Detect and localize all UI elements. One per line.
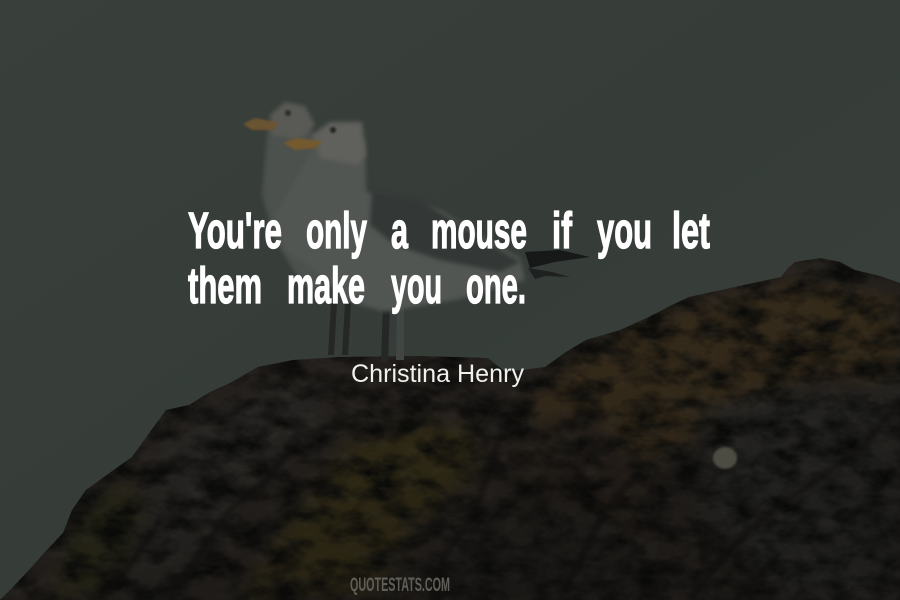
front gull body xyxy=(275,140,525,312)
quote line 1: You're xyxy=(188,202,282,259)
rear gull eye xyxy=(285,110,291,116)
rock: moss and stone patches xyxy=(264,282,900,579)
rock: dark crevices xyxy=(126,412,890,569)
front gull eye xyxy=(330,127,336,133)
rock: mossy cliff xyxy=(0,250,900,600)
quote line 2: you xyxy=(391,257,442,314)
rear gull beak xyxy=(243,118,278,130)
quote line 1 xyxy=(188,202,710,259)
gull tail feathers xyxy=(525,250,590,268)
quote line 2: make xyxy=(287,257,365,314)
quote line 1: only xyxy=(306,202,367,259)
front gull legs xyxy=(381,305,404,362)
rock: surface texture xyxy=(0,250,900,600)
watermark: QUOTESTATS.COM xyxy=(350,575,450,596)
rear gull legs xyxy=(328,303,351,355)
quote line 2: them xyxy=(188,257,262,314)
rock: overall shading xyxy=(0,250,900,600)
quote line 2: one. xyxy=(466,257,526,314)
quote line 2 xyxy=(188,257,526,314)
quote text xyxy=(188,202,710,314)
author name: Christina Henry xyxy=(351,360,524,388)
quote line 1: you xyxy=(597,202,652,259)
rear gull body xyxy=(262,118,325,300)
birds: two seagulls xyxy=(243,102,590,362)
front gull wing xyxy=(370,190,520,272)
quote line 1: a xyxy=(391,202,408,259)
quote line 1: mouse xyxy=(431,202,527,259)
front gull beak xyxy=(283,138,322,150)
quote line 1: let xyxy=(672,202,710,259)
front gull head xyxy=(312,122,366,165)
quote line 1: if xyxy=(552,202,573,259)
rear gull head xyxy=(270,102,315,140)
rock: round pale stone xyxy=(713,447,737,469)
